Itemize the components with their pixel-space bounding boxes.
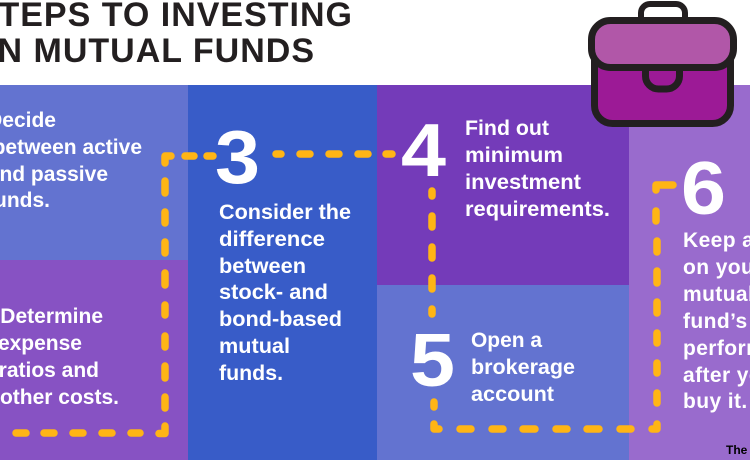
panel: step 3 stock and bond funds: 3 xyxy=(215,115,260,199)
dashed connector path xyxy=(16,154,673,434)
panel: step 6 keep an eye on performance: 6 xyxy=(681,146,726,230)
panel: step 5 brokerage account xyxy=(377,285,629,460)
title xyxy=(0,0,353,70)
panel: step 1 determine expense ratios: ratios and xyxy=(0,359,99,382)
panel: step 3 stock and bond funds: between xyxy=(219,255,306,278)
panel: step 1 determine expense ratios xyxy=(0,260,188,460)
panel: step 1 determine expense ratios: expense xyxy=(0,332,82,355)
panel: step 3 stock and bond funds: stock- and xyxy=(219,281,328,304)
panel: step 3 stock and bond funds: bond-based xyxy=(219,308,342,331)
panel: step 6 keep an eye on performance xyxy=(629,85,750,460)
panel: step 1 determine expense ratios: Determine xyxy=(0,305,103,328)
panel: step 4 minimum investment: investment xyxy=(465,171,581,194)
panel: step 3 stock and bond funds xyxy=(188,85,378,460)
panel: step 3 stock and bond funds: difference xyxy=(219,228,325,251)
panel: step 3 stock and bond funds: mutual xyxy=(219,335,290,358)
panel: step 3 stock and bond funds: Consider the xyxy=(219,201,351,224)
panel: step 1 determine expense ratios: other costs. xyxy=(0,386,119,409)
panel: step 6 keep an eye on performance: fund’s xyxy=(683,310,748,333)
panel: step 4 minimum investment: minimum xyxy=(465,144,563,167)
panel: step 5 brokerage account: brokerage xyxy=(471,356,575,379)
panel: step 4 minimum investment: requirements. xyxy=(465,198,610,221)
panel: step 6 keep an eye on performance: buy it. xyxy=(683,390,748,413)
panel: step 3 stock and bond funds: funds. xyxy=(219,362,283,385)
panel: step 5 brokerage account: account xyxy=(471,383,554,406)
panel: step 4 minimum investment xyxy=(377,85,629,285)
panel: step 5 brokerage account: 5 xyxy=(410,318,455,402)
icon: briefcase xyxy=(592,4,734,124)
panel: step 4 minimum investment: 4 xyxy=(401,108,446,192)
panel: step 5 brokerage account: Open a xyxy=(471,329,542,352)
panel: step 4 minimum investment: Find out xyxy=(465,117,549,140)
panel: step 2 decide active or passive xyxy=(0,85,188,260)
